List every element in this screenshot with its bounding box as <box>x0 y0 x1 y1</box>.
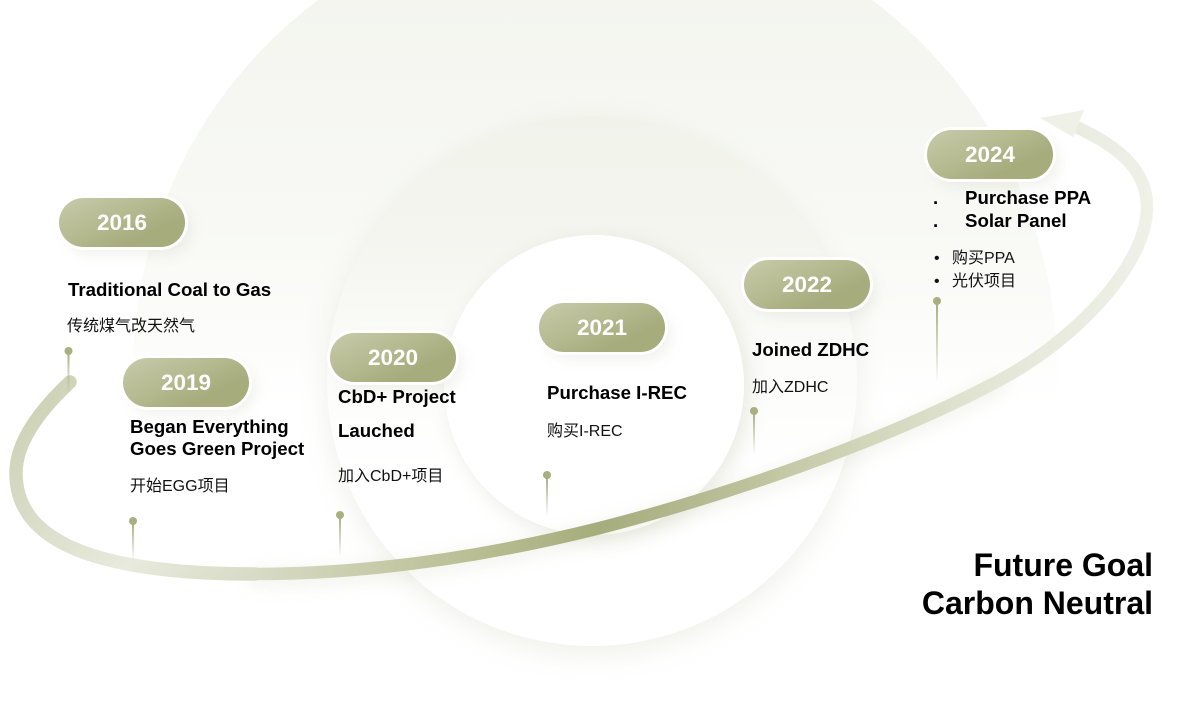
year badge: 2019 <box>123 358 249 407</box>
title: future goal <box>922 547 1153 621</box>
heading: 2021 milestone: Purchase I-REC <box>547 382 687 403</box>
caption list: 2024 milestones: 购买PPA <box>952 250 1015 267</box>
heading: 2019 milestone: Began Everything <box>130 416 289 437</box>
year badge: 2024: 2024 <box>965 142 1015 167</box>
pin: 2024 <box>933 297 941 383</box>
arrow head <box>1040 110 1084 137</box>
heading: 2019 milestone: Goes Green Project <box>130 438 304 459</box>
pin: 2016 <box>64 347 72 395</box>
year badge: 2021: 2021 <box>577 315 627 340</box>
pin: 2020 <box>336 511 344 557</box>
title: future goal: Carbon Neutral <box>922 585 1153 621</box>
year badge: 2016 <box>59 198 185 247</box>
caption: 2022 milestone: 加入ZDHC <box>752 379 828 396</box>
year badge: 2021 <box>539 303 665 352</box>
caption: 2021 milestone: 购买I-REC <box>547 423 623 440</box>
outer circle <box>133 0 1057 560</box>
heading: 2020 milestone: CbD+ Project <box>338 386 456 407</box>
year badge: 2022: 2022 <box>782 272 832 297</box>
caption list: 2024 milestones <box>934 249 1016 290</box>
pin: 2019 <box>129 517 137 561</box>
heading: 2019 milestone <box>130 416 304 459</box>
year badge: 2020 <box>330 333 456 382</box>
heading: 2020 milestone: Lauched <box>338 420 415 441</box>
title: future goal: Future Goal <box>973 547 1153 583</box>
heading list: 2024 milestones: . <box>933 187 938 208</box>
caption: 2019 milestone: 开始EGG项目 <box>130 478 230 495</box>
year badge: 2016: 2016 <box>97 210 147 235</box>
inner white circle <box>444 235 749 540</box>
arrow: growth curve <box>16 110 1147 578</box>
heading: 2020 milestone <box>338 386 456 441</box>
heading list: 2024 milestones: Purchase PPA <box>965 187 1091 208</box>
year badge: 2019: 2019 <box>161 370 211 395</box>
pin: 2021 <box>543 471 551 517</box>
caption: 2016 milestone: 传统煤气改天然气 <box>67 318 195 335</box>
year badge: 2022 <box>744 260 870 309</box>
heading list: 2024 milestones: Solar Panel <box>965 210 1067 231</box>
year badge: 2024 <box>927 130 1053 179</box>
middle circle <box>327 116 857 653</box>
heading: 2022 milestone: Joined ZDHC <box>752 339 869 360</box>
caption list: 2024 milestones: 光伏项目 <box>952 273 1016 290</box>
pin: 2022 <box>750 407 758 454</box>
year badge: 2020: 2020 <box>368 345 418 370</box>
caption list: 2024 milestones: • <box>934 250 940 267</box>
caption list: 2024 milestones: • <box>934 273 940 290</box>
heading list: 2024 milestones: . <box>933 210 938 231</box>
heading list: 2024 milestones <box>933 187 1091 231</box>
caption: 2020 milestone: 加入CbD+项目 <box>338 468 443 485</box>
heading: 2016 milestone: Traditional Coal to Gas <box>68 279 271 300</box>
